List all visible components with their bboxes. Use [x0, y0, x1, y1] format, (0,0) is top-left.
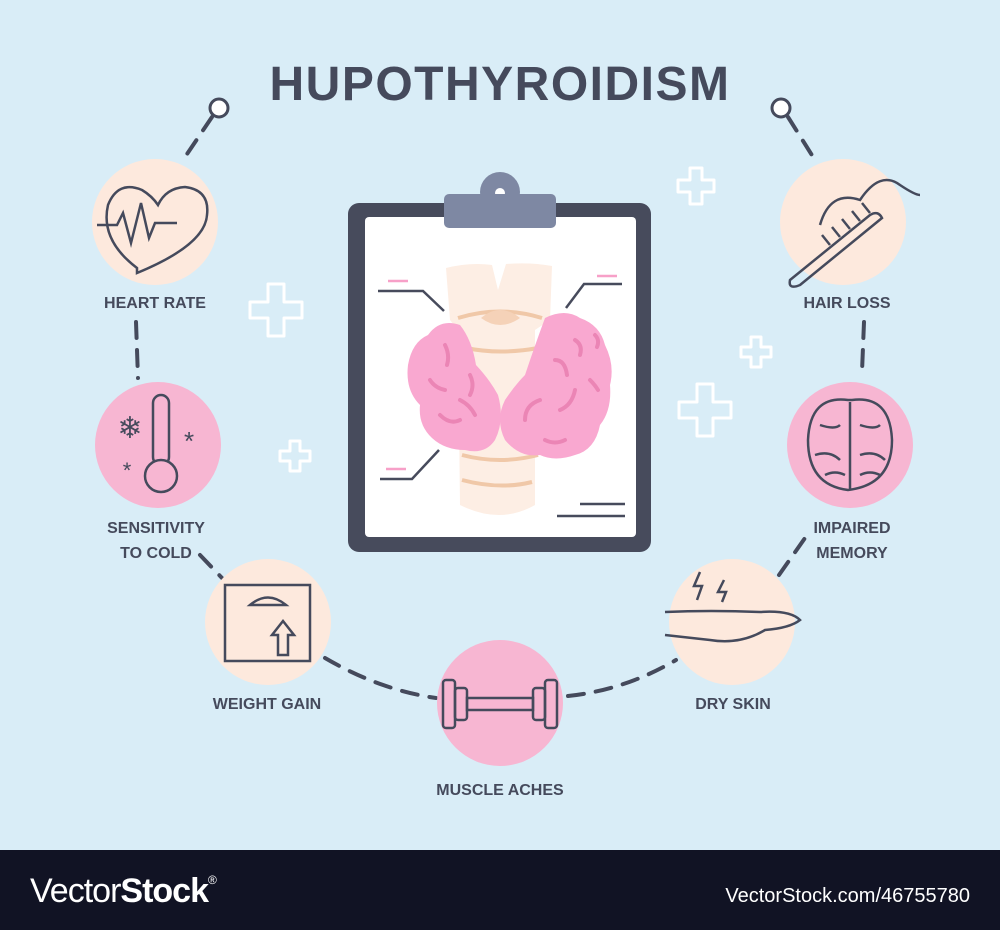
- item: weight gain: [205, 559, 331, 713]
- item: sensitivity to cold: SENSITIVITY: [107, 520, 205, 537]
- item: dry skin: [665, 559, 800, 713]
- item: dry skin: DRY SKIN: [695, 696, 771, 713]
- title: HUPOTHYROIDISM: [269, 58, 731, 111]
- footer bar: ®: [208, 873, 217, 887]
- footer bar: VectorStock: [30, 872, 208, 910]
- thyroid illustration: [408, 263, 612, 515]
- item: sensitivity to cold: [95, 382, 221, 562]
- item: weight gain: WEIGHT GAIN: [213, 696, 321, 713]
- item: sensitivity to cold: *: [184, 426, 194, 456]
- clipboard: [348, 172, 651, 552]
- item: heart rate: HEART RATE: [104, 295, 206, 312]
- item: hair loss: [780, 159, 920, 312]
- item: sensitivity to cold: *: [123, 458, 132, 483]
- item: impaired memory: IMPAIRED: [813, 520, 891, 537]
- footer bar: VectorStock.com/46755780: [725, 885, 970, 907]
- plus signs: [250, 168, 771, 471]
- item: sensitivity to cold: ❄: [117, 412, 143, 445]
- item: muscle aches: MUSCLE ACHES: [436, 782, 564, 799]
- item: impaired memory: [787, 382, 913, 562]
- dashed connector path: [136, 117, 864, 698]
- footer bar: [0, 850, 1000, 930]
- callout lines: [378, 284, 625, 516]
- item: sensitivity to cold: TO COLD: [120, 545, 192, 562]
- item: heart rate: [92, 159, 218, 312]
- item: hair loss: HAIR LOSS: [803, 295, 891, 312]
- pins: [210, 99, 790, 117]
- item: impaired memory: MEMORY: [816, 545, 888, 562]
- item: muscle aches: [436, 640, 564, 799]
